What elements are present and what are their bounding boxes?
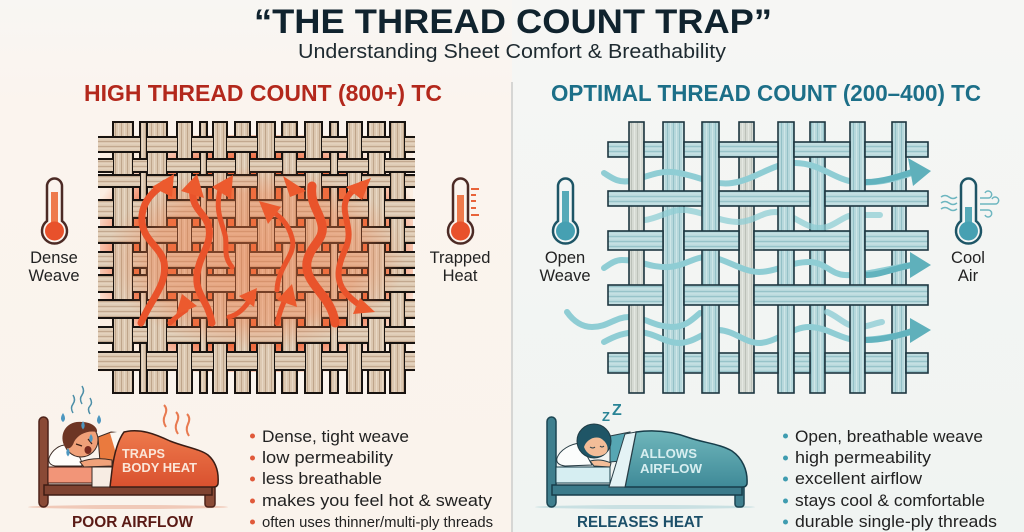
air flow waves: [567, 163, 912, 343]
icon: thermometer cool, open weave: [553, 179, 578, 244]
list: high thread count drawbacks: less breathable: [262, 469, 382, 488]
warp threads passing over the air flow: [629, 122, 865, 393]
list: high thread count drawbacks: low permeability: [262, 448, 394, 467]
icon: thermometer cool with air: [941, 179, 999, 244]
title: “THE THREAD COUNT TRAP”: [254, 3, 772, 41]
heading: optimal thread count: OPTIMAL THREAD COUNT (200–400) TC: [551, 80, 981, 106]
list: high thread count drawbacks: often uses thinner/multi-ply threads: [262, 514, 493, 531]
icon: thermometer hot, trapped heat: [448, 179, 479, 244]
icon: hot sleeper in bed: [28, 386, 228, 509]
icon: cool sleeper in bed: AIRFLOW: [640, 462, 702, 476]
list: optimal thread count benefits: high permeability: [795, 448, 932, 467]
label: poor airflow: POOR AIRFLOW: [72, 514, 194, 531]
label: open weave: Open: [545, 249, 585, 267]
label: cool air: Air: [958, 267, 979, 285]
icon: hot sleeper in bed: TRAPS: [122, 447, 165, 461]
icon: cool sleeper in bed: Z: [602, 409, 610, 424]
subtitle: Understanding Sheet Comfort & Breathability: [298, 41, 726, 63]
list: optimal thread count benefits: [783, 427, 997, 531]
icon: cool sleeper in bed: ALLOWS: [640, 447, 697, 461]
chart: dense weave with trapped heat arrows: [90, 122, 423, 393]
label: trapped heat: Trapped: [430, 249, 490, 267]
list: optimal thread count benefits: durable single-ply threads: [795, 512, 997, 531]
heat arrows: [141, 183, 366, 323]
label: dense weave: Dense: [30, 249, 78, 267]
label: open weave: Weave: [539, 267, 591, 285]
list: high thread count drawbacks: Dense, tight weave: [262, 427, 409, 446]
warp threads passing under the air flow: [663, 122, 906, 393]
icon: thermometer hot, dense weave: [42, 179, 67, 243]
chart: open weave with cool air arrows: [567, 122, 931, 393]
label: releases heat: RELEASES HEAT: [577, 514, 703, 531]
icon: cool sleeper in bed: [535, 402, 755, 509]
label: cool air: Cool: [951, 249, 985, 267]
list: optimal thread count benefits: Open, breathable weave: [795, 427, 983, 446]
label: dense weave: Weave: [28, 267, 80, 285]
list: high thread count drawbacks: makes you feel hot & sweaty: [262, 491, 493, 510]
icon: hot sleeper in bed: BODY HEAT: [122, 461, 197, 475]
sweat drops: [61, 413, 101, 456]
list: high thread count drawbacks: [250, 427, 493, 531]
heading: high thread count: HIGH THREAD COUNT (800+) TC: [84, 80, 442, 106]
label: trapped heat: Heat: [443, 267, 478, 285]
cool air arrowheads: [866, 158, 931, 343]
icon: cool sleeper in bed: Z: [612, 402, 622, 419]
weft threads: [608, 142, 928, 373]
list: optimal thread count benefits: excellent airflow: [795, 469, 923, 488]
list: optimal thread count benefits: stays cool & comfortable: [795, 491, 985, 510]
